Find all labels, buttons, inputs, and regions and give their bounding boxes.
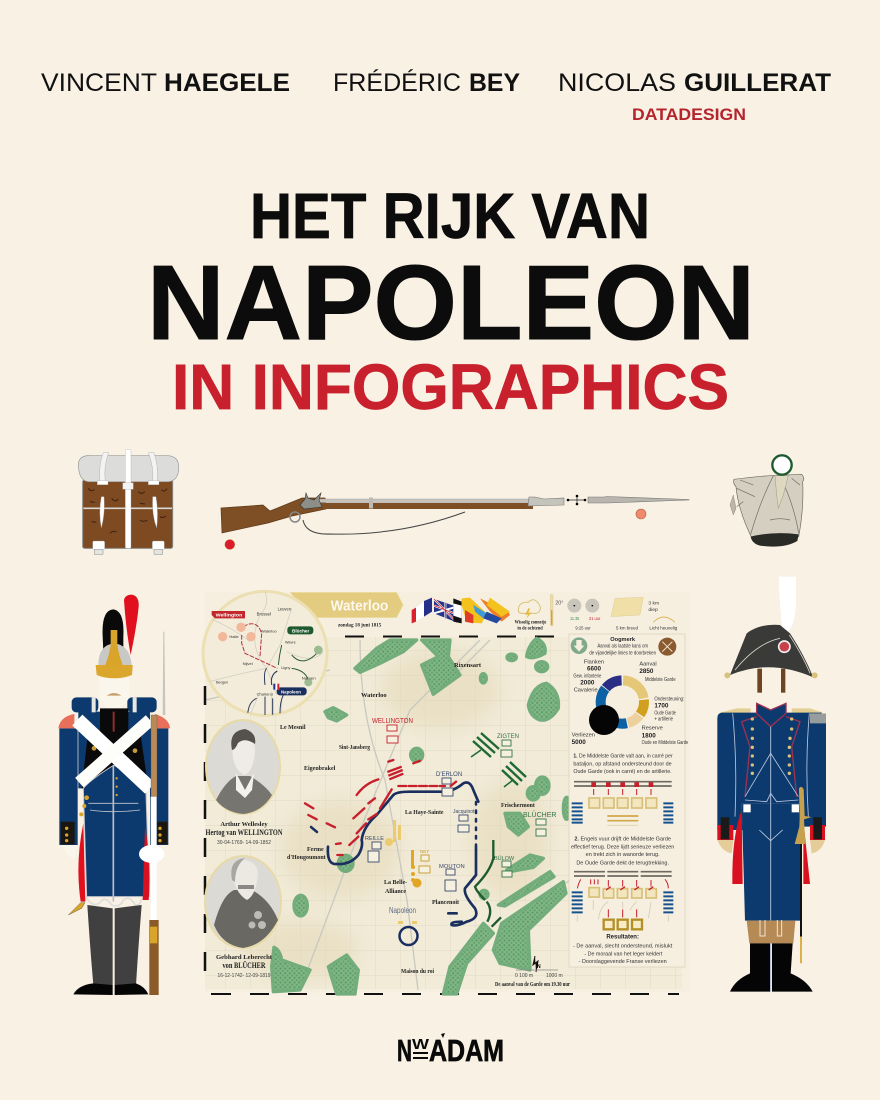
icon: terrain box: 3 km bbox=[648, 600, 659, 606]
weather and terrain icons bbox=[515, 594, 563, 631]
epaulettes bbox=[58, 714, 74, 728]
icon: terrain box: 5 km breed bbox=[616, 626, 638, 632]
bicorne bbox=[730, 625, 813, 677]
map border ticks bbox=[211, 636, 679, 994]
cuffs and hands bbox=[717, 825, 733, 840]
icon: objective arrow bbox=[571, 637, 587, 654]
cross belts bbox=[77, 720, 150, 788]
author: Nicolas Guillerat bbox=[558, 69, 831, 97]
author: Vincent Haegele: HAEGELE bbox=[164, 69, 290, 97]
face bbox=[99, 678, 129, 711]
step 2 text: 2. Engels vuur drijft de Middelste Garde bbox=[574, 837, 671, 843]
battle lines: French army bbox=[311, 782, 478, 945]
Garde formations bbox=[385, 820, 422, 924]
banner title: Waterloo bbox=[331, 599, 388, 615]
map place names bbox=[280, 662, 570, 988]
musket barrel bbox=[312, 503, 533, 509]
chart labels: 2850 bbox=[639, 668, 654, 675]
chart labels: Oude Garde bbox=[654, 710, 676, 716]
chart labels: Verliezen bbox=[572, 732, 595, 738]
sleeves bbox=[59, 728, 78, 845]
inset place names: Namen bbox=[302, 675, 316, 680]
step 1 text: bataljon, op afstand ondersteund door de bbox=[573, 761, 672, 767]
map place names: Ferme bbox=[307, 847, 324, 853]
chart labels: 2000 bbox=[580, 680, 595, 687]
musket bbox=[151, 715, 157, 797]
map place names: Maison du roi bbox=[401, 969, 434, 975]
map place names: De aanval van de Garde om 19.30 uur bbox=[495, 982, 570, 988]
step 2 text: en trekt zich in wanorde terug. bbox=[586, 852, 660, 858]
hands bbox=[62, 845, 77, 859]
label: Napoleon: Napoleon bbox=[281, 689, 301, 695]
inset place names: Ligny bbox=[281, 665, 290, 670]
title line 3: IN INFOGRAPHICS bbox=[172, 351, 729, 423]
compass and scale: 0 100 m bbox=[515, 973, 533, 979]
compass and scale bbox=[515, 956, 563, 979]
icon: weather bbox=[518, 600, 540, 613]
musket stock bbox=[221, 498, 326, 533]
gaiters bbox=[747, 921, 795, 943]
title line 2: NAPOLEON bbox=[147, 244, 755, 362]
publisher logo bbox=[397, 1033, 504, 1068]
coat skirts bbox=[83, 765, 149, 897]
boots bbox=[87, 905, 113, 985]
publisher logo: ADAM bbox=[429, 1033, 504, 1068]
compass and scale: 1000 m bbox=[546, 973, 563, 979]
icon: dials: 9:25 uur bbox=[575, 626, 591, 632]
publisher logo: W bbox=[412, 1036, 430, 1053]
chart labels: Flanken bbox=[584, 659, 604, 665]
map place names: Frischermont bbox=[501, 803, 535, 809]
step 1 text: 1. De Middelste Garde valt aan, in carré per bbox=[573, 754, 673, 760]
bayonet bbox=[588, 496, 689, 503]
authors bbox=[41, 68, 831, 124]
chart labels: Gew. infanterie bbox=[573, 673, 601, 679]
objective text: Aanval als laatste kans om bbox=[597, 643, 648, 649]
map place names: d'Hougoumont bbox=[287, 855, 326, 861]
caption: Blücher: Gebhard Leberecht bbox=[216, 955, 272, 961]
chart labels: 1800 bbox=[642, 732, 656, 739]
chart labels: 1700 bbox=[654, 702, 669, 709]
chart labels: Ondersteuning: bbox=[654, 696, 685, 702]
inset place names: Wavre bbox=[285, 640, 296, 645]
battle date: zondag 18 juni 1815 bbox=[338, 623, 382, 629]
map place names: La Belle- bbox=[384, 880, 407, 886]
inset map: campaign overview bbox=[203, 591, 327, 715]
map roads bbox=[205, 640, 570, 990]
battle lines: Prussian army bbox=[475, 840, 501, 927]
icon: backpack bbox=[78, 449, 179, 554]
chart labels: Reserve bbox=[642, 726, 663, 732]
step 1 British lines bbox=[574, 782, 672, 795]
coat bbox=[717, 713, 826, 830]
portrait: Wellington bbox=[206, 720, 280, 814]
map place names: Jacquinot bbox=[453, 809, 475, 815]
author: Vincent Haegele: VINCENT bbox=[41, 69, 157, 97]
objective text: Oogmerk bbox=[610, 637, 636, 643]
boots bbox=[730, 943, 770, 992]
map sheet bbox=[203, 591, 690, 994]
step 2 text: effectief terug. Deze lijdt serieuze verliezen bbox=[571, 844, 674, 850]
epaulettes bbox=[720, 708, 751, 713]
map place names: Napoleon bbox=[389, 906, 416, 915]
objective text bbox=[589, 637, 656, 656]
inset place names: Leuven bbox=[278, 606, 292, 611]
collar and lapels bbox=[757, 703, 786, 727]
white pockets bbox=[743, 804, 751, 812]
inset place names: Bergen bbox=[216, 680, 228, 685]
chart labels: 5000 bbox=[572, 739, 586, 746]
sword bbox=[798, 833, 804, 937]
author: Nicolas Guillerat: NICOLAS bbox=[558, 69, 676, 97]
inset place names: Charleroi bbox=[257, 692, 273, 697]
icon: dials: 11.35 bbox=[570, 616, 580, 621]
map place names: Sint-Jansberg bbox=[339, 745, 370, 751]
compass and scale: N bbox=[537, 964, 541, 970]
map place names: NEY bbox=[420, 849, 429, 854]
icon: terrain box: diep bbox=[648, 607, 658, 613]
icon: crossed swords bbox=[658, 638, 676, 656]
label: Wellington: Wellington bbox=[216, 613, 242, 619]
battle lines: British army bbox=[305, 760, 456, 855]
sword tip bbox=[68, 903, 85, 915]
inset place names: Halle bbox=[229, 634, 239, 639]
caption: Wellington bbox=[206, 821, 283, 846]
map place names: REILLE bbox=[365, 836, 384, 842]
author: Frédéric Bey: BEY bbox=[469, 69, 520, 97]
caption: Blücher: von BLÜCHER bbox=[222, 961, 266, 970]
map place names: ZIGTEN bbox=[497, 734, 519, 740]
credit: datadesign: DATADESIGN bbox=[632, 105, 746, 124]
unit symbols bbox=[368, 725, 546, 891]
label: Blücher: Blücher bbox=[292, 628, 309, 634]
step 2 text: De Oude Garde dekt de terugtrekking. bbox=[576, 860, 669, 866]
map place names: Rixensart bbox=[454, 662, 482, 669]
marker: red dot bbox=[225, 540, 235, 550]
caption: Blücher: 16-12-1742- 12-09-1819 bbox=[218, 973, 270, 979]
white plume bbox=[779, 577, 796, 635]
icon: dials bbox=[567, 599, 601, 632]
icon: terrain box: Licht heuvelig bbox=[649, 626, 678, 632]
cockade bbox=[779, 641, 790, 652]
chart labels: Aanval bbox=[639, 662, 657, 668]
map background bbox=[205, 592, 690, 992]
title line 1: HET RIJK VAN bbox=[250, 180, 650, 252]
inset place names bbox=[216, 606, 316, 697]
caption: Wellington: 30-04-1769- 14-09-1852 bbox=[217, 840, 271, 846]
publisher logo: N bbox=[397, 1033, 412, 1068]
icon: musket with bayonet bbox=[221, 493, 689, 534]
panel: losses and attack diagram bbox=[567, 597, 688, 967]
caption: Wellington: Hertog van WELLINGTON bbox=[206, 827, 283, 837]
icon: thermometer bbox=[550, 594, 553, 626]
caption: Wellington: Arthur Wellesley bbox=[220, 821, 268, 828]
author: Frédéric Bey bbox=[333, 68, 520, 97]
waterloo banner bbox=[290, 592, 403, 629]
portrait: Blücher bbox=[205, 856, 281, 948]
map place names: MOUTON bbox=[439, 864, 465, 870]
hat straps bbox=[757, 669, 762, 693]
step 1 text: Oude Garde (ook in carré) en de artillerie. bbox=[573, 769, 672, 775]
icon: cloth sack with cockade bbox=[730, 455, 804, 547]
map forests, north bbox=[325, 638, 559, 794]
flags bbox=[412, 598, 510, 623]
Prussian columns bbox=[471, 733, 526, 787]
chart labels bbox=[572, 659, 688, 746]
chest bbox=[82, 708, 148, 788]
map place names: Alliance bbox=[385, 889, 406, 895]
map place names: BÜLOW bbox=[494, 855, 515, 862]
map place names: Plancenoit bbox=[432, 900, 459, 906]
chart labels: Cavalerie bbox=[574, 687, 598, 693]
map place names: Eigenbrakel bbox=[304, 766, 336, 772]
step 2 diagram bbox=[572, 872, 673, 929]
icon: terrain box bbox=[611, 597, 678, 632]
inset place names: Nijvel bbox=[243, 661, 253, 666]
soldier: left, grenadier bbox=[58, 595, 170, 995]
icon: dials: 21 uur bbox=[589, 616, 601, 621]
objective text: de vijandelijke linies te doorbreken bbox=[589, 650, 656, 656]
weather and terrain icons: Wisselig zonnetje bbox=[515, 620, 546, 625]
chart labels: Oude en Middelste Garde bbox=[642, 740, 688, 746]
step 2 text bbox=[571, 837, 674, 866]
map place names: Le Mesnil bbox=[280, 725, 306, 731]
results text: - Doorslaggevende Franse verliezen bbox=[579, 959, 667, 965]
musket sling bbox=[303, 512, 465, 534]
title bbox=[147, 180, 755, 423]
step 1 French squares bbox=[572, 798, 673, 825]
musket muzzle bbox=[528, 497, 564, 506]
red coat tails bbox=[732, 810, 743, 884]
donut chart: forces bbox=[592, 671, 653, 733]
inset place names: Waterloo bbox=[261, 628, 277, 633]
marker: salmon dot bbox=[636, 509, 646, 519]
author: Frédéric Bey: FRÉDÉRIC bbox=[333, 68, 461, 97]
map place names: Waterloo bbox=[361, 692, 387, 699]
scalloped hem bbox=[86, 897, 142, 906]
weather and terrain icons: in de ochtend bbox=[517, 626, 543, 631]
map place names: D'ERLON bbox=[436, 772, 462, 778]
red coat tails bbox=[78, 823, 85, 902]
plume bbox=[124, 595, 139, 655]
chart labels: 6600 bbox=[587, 666, 602, 673]
exploded-view marker bbox=[568, 495, 585, 505]
weather and terrain icons: 20° bbox=[555, 600, 563, 606]
soldier: right, officer bbox=[717, 577, 826, 992]
inset place names: Brussel bbox=[257, 611, 271, 616]
results text bbox=[573, 935, 673, 965]
map place names: WELLINGTON bbox=[372, 716, 413, 725]
results text: Resultaten: bbox=[606, 935, 639, 941]
chart labels: + artillerie bbox=[654, 717, 673, 723]
results text: - De moraal van het leger keldert bbox=[584, 951, 663, 957]
losses circle bbox=[589, 705, 619, 735]
map place names: La Haye-Sainte bbox=[405, 810, 444, 816]
author: Vincent Haegele bbox=[41, 69, 290, 97]
caption: Blücher bbox=[216, 955, 272, 979]
musket lock bbox=[300, 493, 322, 509]
map place names: BLÜCHER bbox=[523, 811, 556, 819]
chart labels: Middelste Garde bbox=[645, 677, 676, 683]
bearskin and helmet bbox=[96, 609, 133, 678]
buttons bbox=[751, 717, 793, 775]
step 1 text bbox=[573, 754, 673, 775]
map forests, south bbox=[272, 787, 570, 994]
tunic bbox=[78, 712, 150, 788]
results text: - De aanval, slecht ondersteund, mislukt bbox=[573, 943, 673, 949]
author: Nicolas Guillerat: GUILLERAT bbox=[684, 69, 831, 97]
